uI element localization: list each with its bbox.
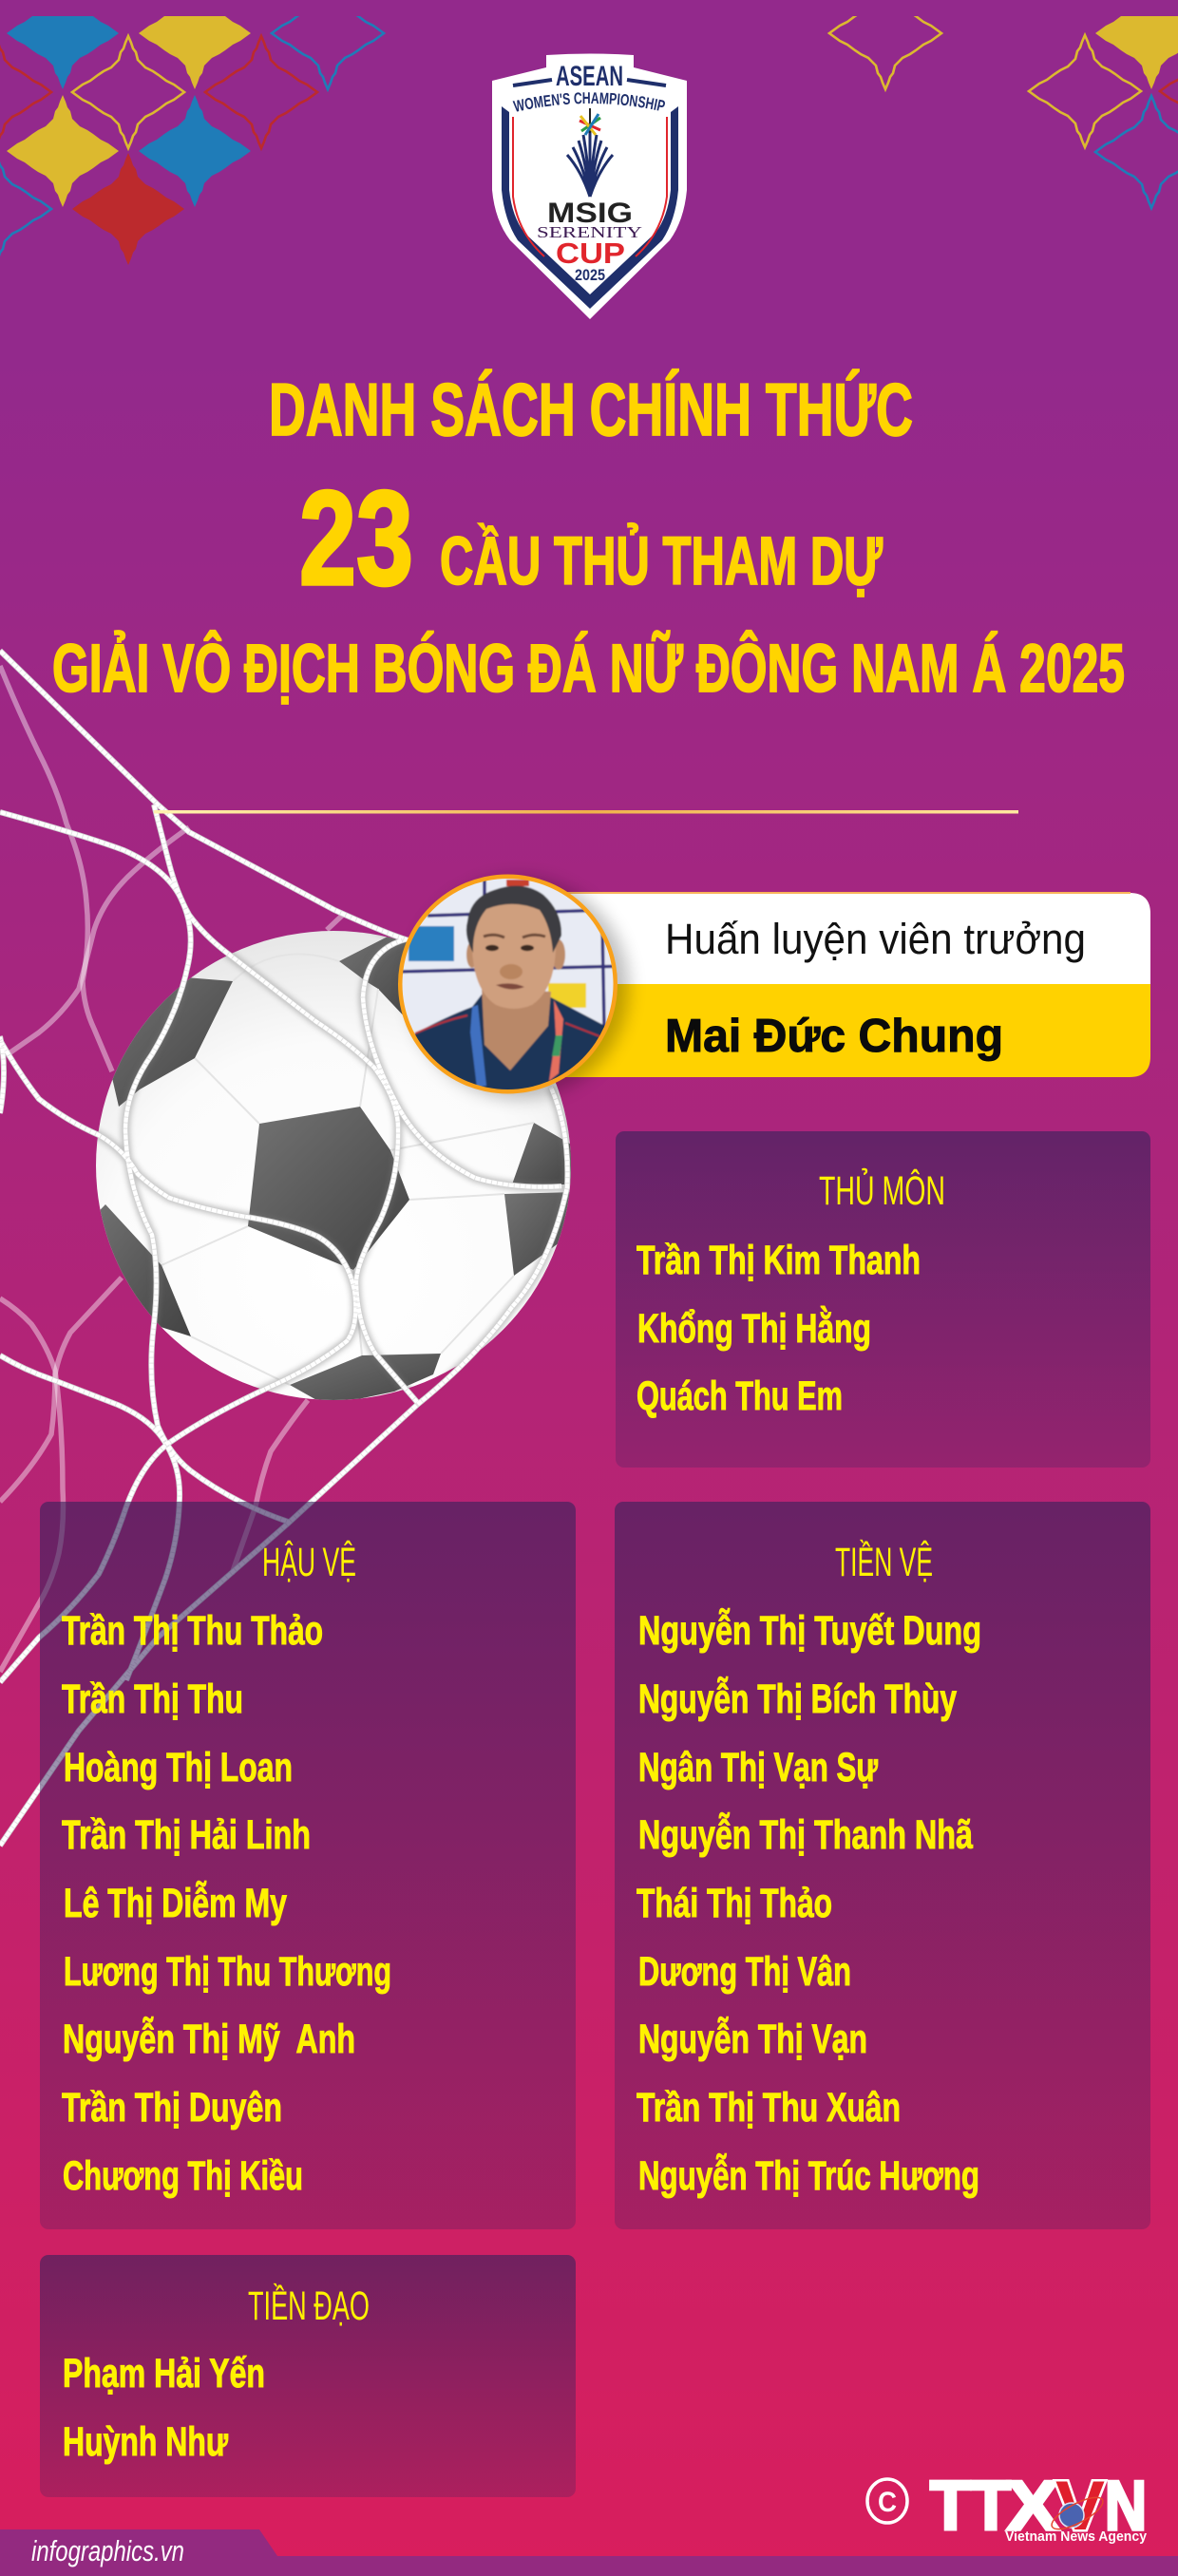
panel: hậu vệ — [40, 1502, 576, 2229]
logo: TTXVN copyright — [867, 2468, 1148, 2545]
logo: TTXVN copyright: C — [878, 2487, 897, 2518]
panel: tiền đạo: Phạm Hải Yến — [63, 2351, 265, 2396]
panel: hậu vệ: Lương Thị Thu Thương — [64, 1949, 391, 1995]
goal net strands — [0, 651, 567, 1846]
footer bar: infographics.vn — [31, 2534, 184, 2567]
panel: hậu vệ: HẬU VỆ — [262, 1540, 356, 1585]
name plate: coach name: Mai Đức Chung — [665, 1011, 1003, 1062]
logo: TTXVN copyright: X — [1007, 2468, 1059, 2545]
panel: thủ môn — [616, 1131, 1150, 1468]
logo: MSIG Serenity Cup shield: CUP — [556, 237, 625, 270]
footer bar — [0, 2529, 1178, 2576]
coach portrait — [398, 874, 618, 1094]
logo: MSIG Serenity Cup shield — [492, 53, 687, 319]
logo: MSIG Serenity Cup shield: SERENITY — [537, 223, 642, 241]
panel: tiền vệ: Nguyễn Thị Trúc Hương — [638, 2152, 979, 2199]
decorative star pattern — [0, 0, 1178, 265]
coach card — [390, 869, 1150, 1102]
title — [52, 368, 1125, 707]
panel: tiền đạo: TIỀN ĐẠO — [248, 2283, 370, 2329]
panel: tiền vệ: Nguyễn Thị Bích Thùy — [638, 1676, 957, 1722]
panel: tiền vệ: Dương Thị Vân — [638, 1949, 851, 1995]
panel: tiền vệ: Thái Thị Thảo — [636, 1881, 832, 1926]
panel: hậu vệ: Lê Thị Diễm My — [64, 1880, 287, 1926]
panel: hậu vệ: Hoàng Thị Loan — [64, 1745, 293, 1790]
title: CẦU THỦ THAM DỰ — [440, 523, 883, 599]
name plate: coach name — [475, 984, 1150, 1077]
logo: TTXVN copyright: T — [971, 2468, 1011, 2545]
panel: thủ môn: THỦ MÔN — [819, 1167, 945, 1214]
panel: tiền vệ: TIỀN VỆ — [835, 1540, 933, 1585]
panel: tiền vệ: Nguyễn Thị Thanh Nhã — [638, 1811, 974, 1858]
panel: hậu vệ: Trần Thị Duyên — [62, 2085, 282, 2131]
logo: MSIG Serenity Cup shield: 2025 — [575, 266, 605, 284]
name plate: role — [475, 892, 1150, 984]
logo: TTXVN copyright: V — [1055, 2468, 1105, 2545]
soccer ball — [96, 931, 571, 1400]
logo: TTXVN copyright: T — [930, 2468, 971, 2545]
icon: torch fan — [567, 108, 613, 197]
name plate: role: Huấn luyện viên trưởng — [665, 915, 1086, 963]
panel: tiền vệ: Nguyễn Thị Tuyết Dung — [638, 1607, 981, 1654]
logo: MSIG Serenity Cup shield: ASEAN — [556, 61, 623, 92]
title: DANH SÁCH CHÍNH THỨC — [269, 368, 913, 451]
logo: MSIG Serenity Cup shield: MSIG — [547, 198, 633, 229]
panel: thủ môn: Trần Thị Kim Thanh — [636, 1238, 921, 1283]
logo: TTXVN copyright: N — [1105, 2468, 1147, 2545]
panel: hậu vệ: Chương Thị Kiều — [63, 2153, 303, 2199]
panel: thủ môn: Quách Thu Em — [636, 1373, 843, 1419]
panel: hậu vệ: Nguyễn Thị Mỹ Anh — [63, 2016, 355, 2062]
panel: tiền đạo — [40, 2255, 576, 2497]
divider line — [154, 810, 1018, 813]
panel: thủ môn: Khổng Thị Hằng — [637, 1305, 871, 1352]
panel: tiền đạo: Huỳnh Như — [63, 2419, 229, 2465]
title: 23 — [299, 463, 413, 613]
logo: TTXVN copyright: Vietnam News Agency — [1005, 2529, 1148, 2545]
panel: hậu vệ: Trần Thị Thu — [62, 1676, 243, 1722]
panel: tiền vệ: Ngân Thị Vạn Sự — [638, 1745, 879, 1790]
net background strands — [0, 666, 343, 1672]
panel: tiền vệ — [615, 1502, 1150, 2229]
panel: tiền vệ: Nguyễn Thị Vạn — [638, 2016, 867, 2062]
panel: hậu vệ: Trần Thị Thu Thảo — [62, 1608, 323, 1654]
logo: MSIG Serenity Cup shield: WOMEN'S CHAMPIONSHIP — [513, 92, 665, 112]
panel: tiền vệ: Trần Thị Thu Xuân — [636, 2085, 901, 2131]
panel: hậu vệ: Trần Thị Hải Linh — [62, 1812, 311, 1858]
